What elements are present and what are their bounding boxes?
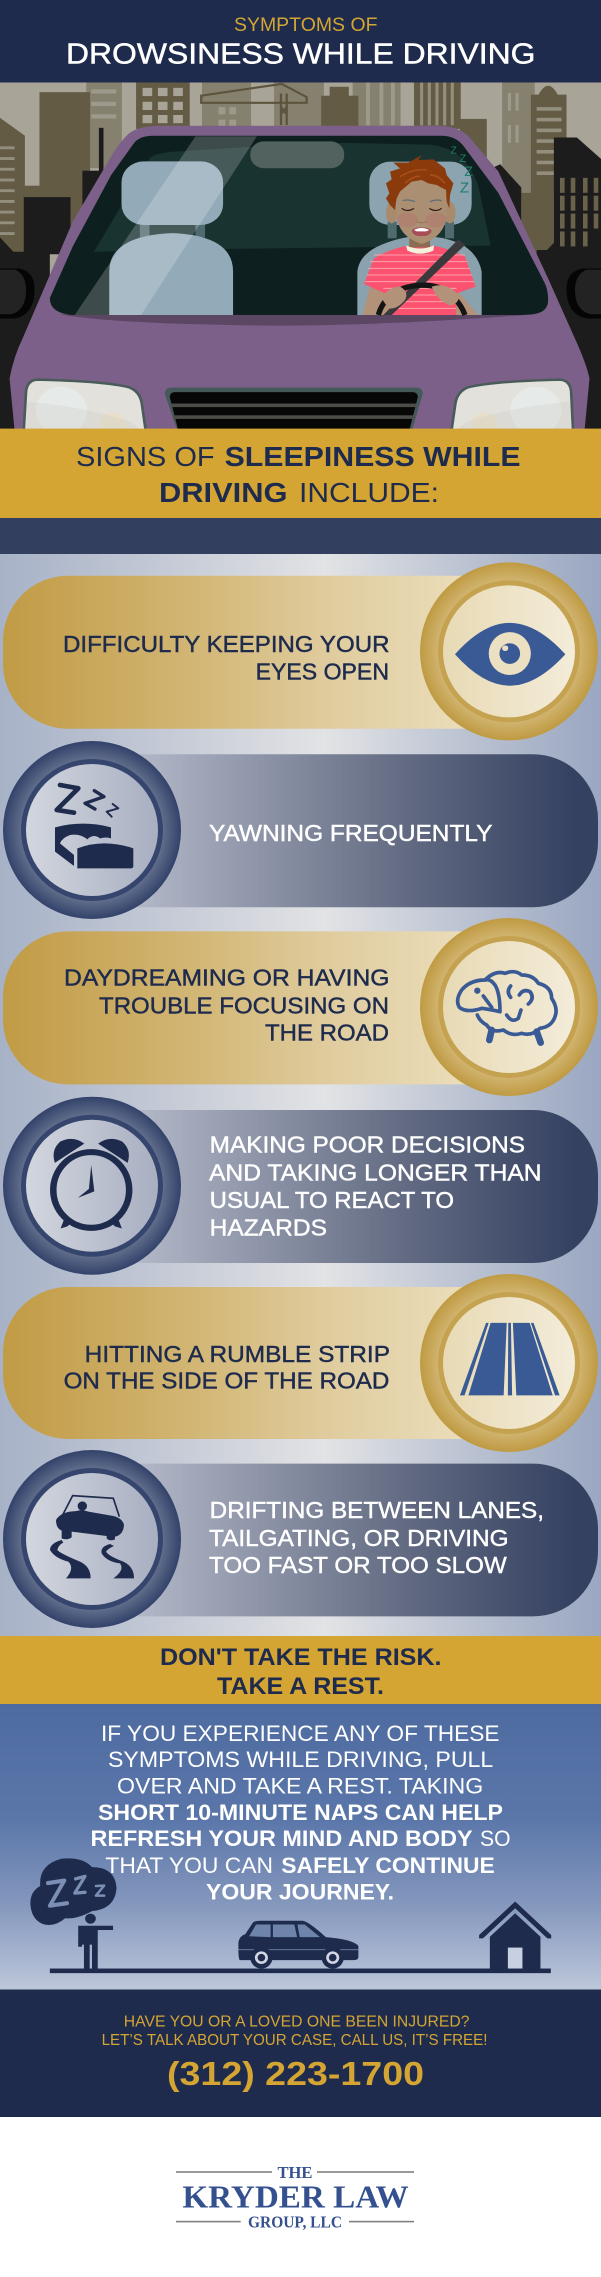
item: drifting between lanes: [3, 1450, 598, 1628]
item: rumble strip: [3, 1274, 598, 1452]
footer logo: The Kryder Law Group: GROUP, LLC: [248, 2212, 342, 2232]
advice text: SYMPTOMS WHILE DRIVING, PULL: [108, 1747, 493, 1772]
banner text: DON'T TAKE THE RISK.: [160, 1644, 441, 1671]
icon: alarm clock: [53, 1139, 129, 1229]
call prompt: LET’S TALK ABOUT YOUR CASE, CALL US, IT’S FREE!: [102, 2032, 487, 2049]
text: TAILGATING, OR DRIVING: [209, 1525, 509, 1551]
grille: [165, 387, 423, 430]
icon: sleeping bed: [55, 785, 133, 868]
text: TROUBLE FOCUSING ON: [99, 993, 389, 1019]
sleeping driver: [357, 146, 482, 315]
banner text: TAKE A REST.: [217, 1673, 384, 1700]
icon: house: [479, 1902, 551, 1970]
snore letters: Z: [451, 146, 457, 157]
item: difficulty keeping eyes open: [3, 562, 598, 740]
text: ON THE SIDE OF THE ROAD: [64, 1368, 389, 1394]
heading: DRIVING: [159, 477, 288, 508]
dark divider band: [0, 518, 601, 554]
subtitle: SYMPTOMS OF: [234, 14, 378, 36]
advice text: [90, 1721, 510, 1904]
text: AND TAKING LONGER THAN: [209, 1159, 542, 1185]
text: YAWNING FREQUENTLY: [209, 820, 493, 846]
panel: take a rest banner: [0, 1636, 601, 1704]
heading: SLEEPINESS WHILE: [225, 441, 521, 472]
headlights: [24, 380, 573, 439]
text: [64, 965, 390, 1046]
text: [209, 1497, 544, 1578]
illustration: sleepy driver in car with city skyline: [0, 82, 601, 439]
icon: parked car: [238, 1921, 358, 1969]
text: DAYDREAMING OR HAVING: [64, 965, 390, 991]
call prompt: HAVE YOU OR A LOVED ONE BEEN INJURED?: [124, 2013, 470, 2030]
advice text: SAFELY CONTINUE: [281, 1853, 495, 1878]
side mirrors: [0, 269, 601, 319]
advice text: OVER AND TAKE A REST. TAKING: [117, 1773, 483, 1798]
icon: skidding car: [50, 1496, 134, 1578]
advice text: THAT YOU CAN: [105, 1853, 273, 1878]
icon: sheep: [458, 972, 556, 1043]
footer logo: The Kryder Law Group: KRYDER LAW: [182, 2178, 409, 2214]
heading: INCLUDE:: [299, 477, 439, 508]
text: [209, 1132, 542, 1241]
car body: [10, 126, 590, 430]
title: DROWSINESS WHILE DRIVING: [66, 39, 536, 71]
panel: advice section: [0, 1704, 601, 1990]
snore letters: Z: [460, 181, 469, 197]
text: USUAL TO REACT TO: [210, 1187, 454, 1213]
text: THE ROAD: [265, 1020, 389, 1046]
heading: [76, 441, 521, 508]
snore letters: [451, 146, 473, 197]
text: HITTING A RUMBLE STRIP: [85, 1341, 390, 1367]
advice text: REFRESH YOUR MIND AND BODY: [90, 1826, 473, 1851]
advice text: SO: [480, 1826, 510, 1851]
heading: SIGNS OF: [76, 441, 215, 472]
advice text: YOUR JOURNEY.: [206, 1879, 394, 1904]
windshield: [50, 136, 548, 326]
icon: eye: [455, 623, 565, 686]
icon: road: [460, 1323, 560, 1395]
banner text: [160, 1644, 441, 1700]
text: [63, 631, 390, 685]
rear-view mirror: [250, 141, 344, 168]
text: [64, 1341, 390, 1394]
windshield glare: [75, 136, 257, 315]
text: HAZARDS: [210, 1215, 327, 1241]
panel: signs banner: [0, 429, 601, 518]
panel: symptoms list: [0, 554, 601, 1636]
text: DIFFICULTY KEEPING YOUR: [63, 631, 390, 657]
footer logo: The Kryder Law Group: [0, 2117, 601, 2277]
passenger seat: [109, 161, 233, 315]
snore letters: Z: [464, 163, 473, 179]
advice text: SHORT 10-MINUTE NAPS CAN HELP: [98, 1800, 503, 1825]
road scene: [30, 1858, 551, 1973]
panel: call to action: [0, 1990, 601, 2117]
item: yawning frequently: [3, 741, 598, 919]
advice text: IF YOU EXPERIENCE ANY OF THESE: [101, 1721, 499, 1746]
text: DRIFTING BETWEEN LANES,: [210, 1497, 544, 1523]
call prompt: [102, 2013, 487, 2049]
text: EYES OPEN: [256, 659, 389, 685]
icon: sleeping person with thought cloud: [30, 1858, 117, 1970]
text: MAKING POOR DECISIONS: [210, 1132, 525, 1158]
text: TOO FAST OR TOO SLOW: [209, 1552, 508, 1578]
snore letters: Z: [459, 153, 466, 165]
footer logo: The Kryder Law Group: THE: [278, 2163, 312, 2182]
phone number: (312) 223-1700: [167, 2055, 424, 2092]
panel: title header: [0, 0, 601, 83]
item: daydreaming: [3, 918, 598, 1096]
item: poor decisions: [3, 1097, 598, 1275]
city skyline: [0, 82, 601, 432]
